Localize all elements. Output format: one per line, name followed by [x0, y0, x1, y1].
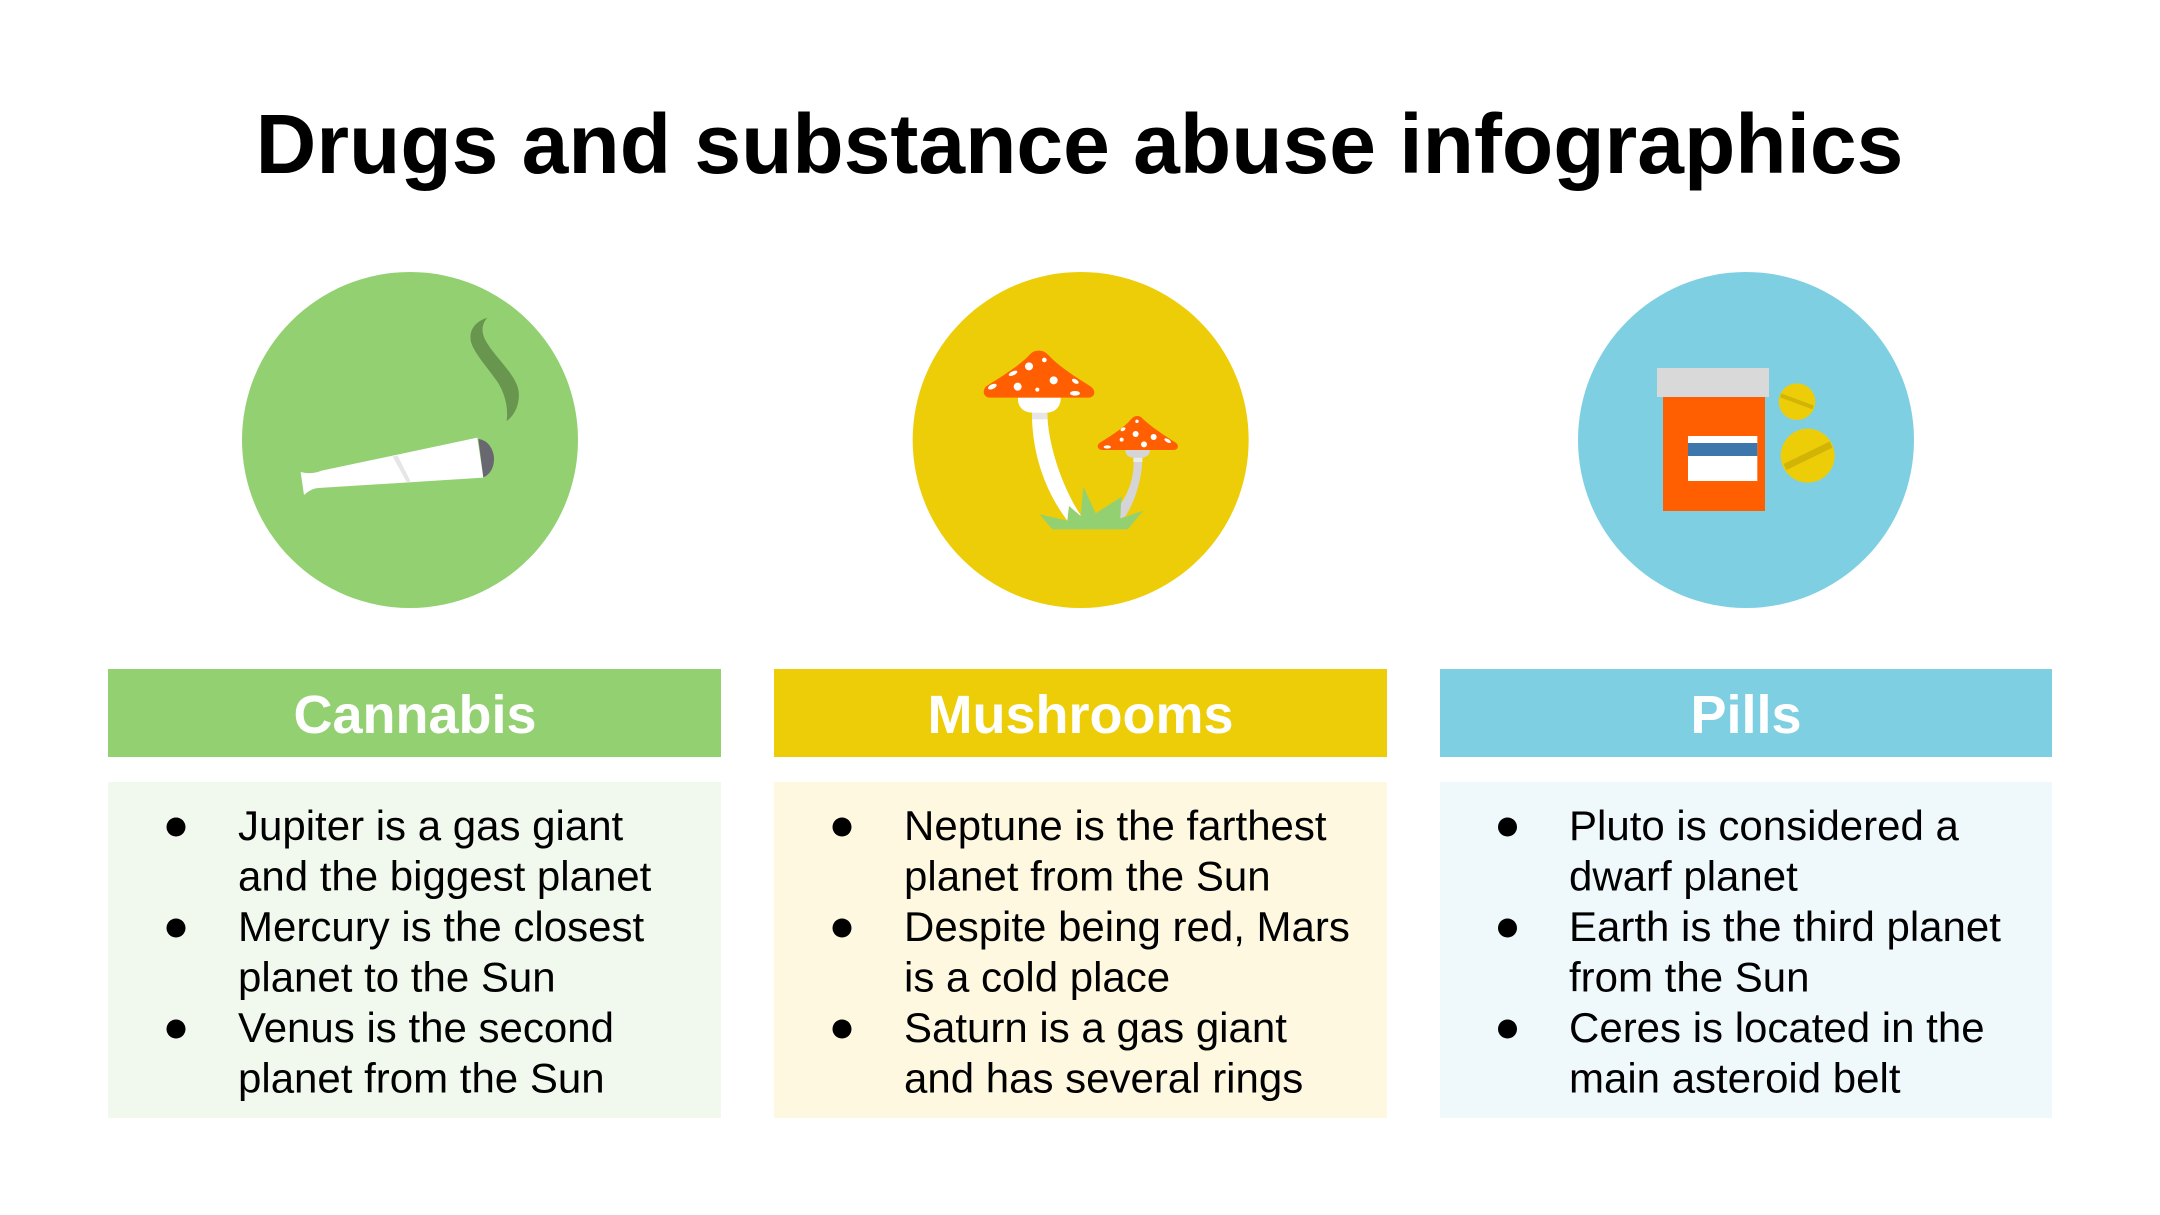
header: Mushrooms [774, 669, 1387, 757]
header: Pills [1440, 669, 2052, 757]
title: Drugs and substance abuse infographics [256, 97, 1903, 191]
text panel: cannabis bullets: planet to the Sun [238, 954, 556, 1000]
text panel: mushrooms bullets: and has several rings [904, 1054, 1303, 1102]
column: cannabis [108, 272, 721, 1118]
text panel: mushrooms bullets: Neptune is the farthest [904, 802, 1327, 849]
column: mushrooms [774, 272, 1387, 1118]
text panel: pills bullets: Pluto is considered a [1569, 802, 1960, 849]
text panel: pills bullets: dwarf planet [1569, 852, 1798, 900]
header: Cannabis: Cannabis [293, 685, 537, 745]
text panel: pills bullets [1440, 782, 2052, 1118]
text panel: mushrooms bullets: Saturn is a gas giant [904, 1004, 1287, 1051]
text panel: pills bullets: Earth is the third planet [1569, 903, 2001, 950]
text panel: cannabis bullets: and the biggest planet [238, 852, 652, 900]
text panel: cannabis bullets: Jupiter is a gas giant [238, 802, 624, 849]
text panel: cannabis bullets: planet from the Sun [238, 1054, 605, 1102]
column: pills [1440, 272, 2052, 1118]
text panel: mushrooms bullets: is a cold place [904, 954, 1170, 1000]
text panel: mushrooms bullets: planet from the Sun [904, 852, 1271, 900]
icon: mushrooms in yellow circle [913, 272, 1249, 608]
text panel: pills bullets: main asteroid belt [1569, 1054, 1901, 1102]
text panel: cannabis bullets: Venus is the second [238, 1004, 614, 1051]
icon: pill bottle in blue circle [1578, 272, 1914, 608]
text panel: pills bullets: Ceres is located in the [1569, 1004, 1985, 1051]
text panel: cannabis bullets [108, 782, 721, 1118]
text panel: cannabis bullets: Mercury is the closest [238, 903, 644, 950]
icon: cannabis joint in green circle [242, 272, 578, 608]
header: Mushrooms: Mushrooms [927, 685, 1234, 745]
text panel: mushrooms bullets [774, 782, 1387, 1118]
header: Pills: Pills [1690, 685, 1802, 745]
text panel: mushrooms bullets: Despite being red, Mars [904, 903, 1350, 950]
text panel: pills bullets: from the Sun [1569, 954, 1809, 1000]
header: Cannabis [108, 669, 721, 757]
